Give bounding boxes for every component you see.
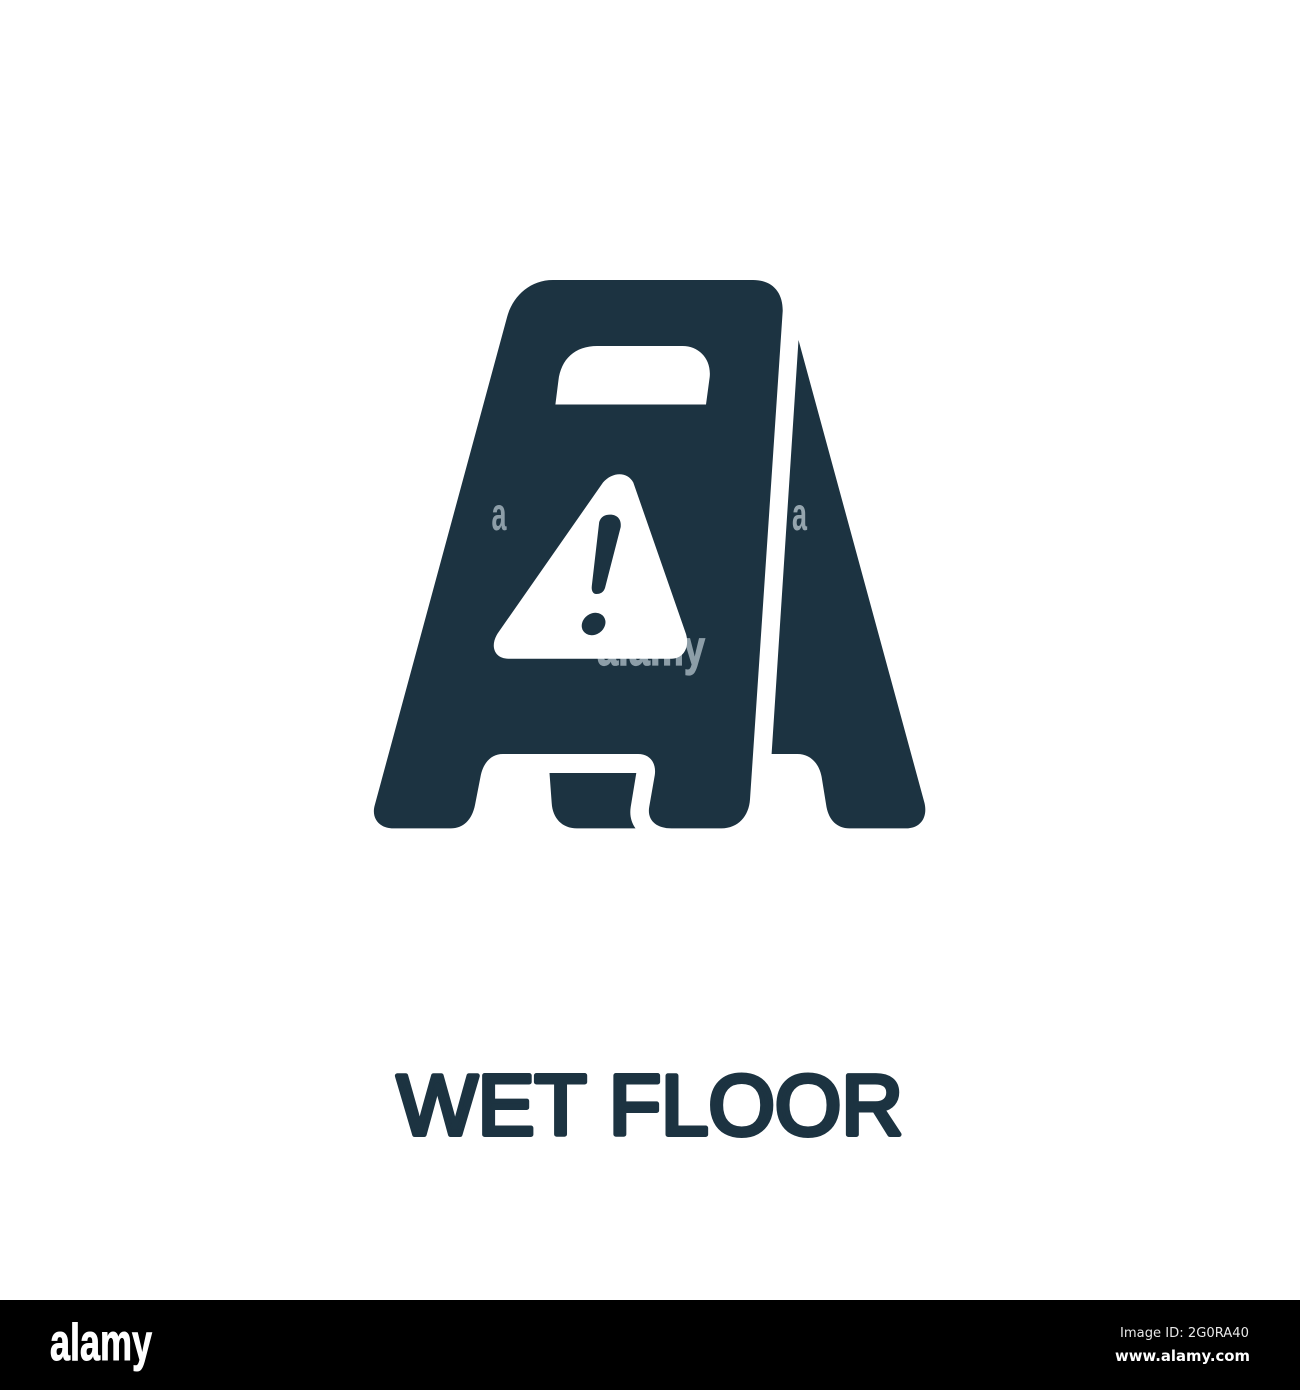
icon: wet floor sign [374, 280, 925, 828]
watermark letter right: a [792, 488, 807, 540]
sign front board [374, 280, 783, 828]
image id: Image ID: 2G0RA40 [1120, 1325, 1249, 1341]
watermark letter left: a [492, 488, 507, 540]
footer logo: alamy [50, 1314, 152, 1372]
footer bar [0, 1300, 1300, 1390]
watermark word: alamy [597, 622, 705, 676]
sign handle cut-out [555, 346, 710, 404]
title: wet floor: WET FLOOR [397, 1058, 903, 1154]
website: www.alamy.com [1115, 1347, 1250, 1365]
warning triangle [494, 474, 687, 659]
sign back leg [772, 340, 925, 828]
exclamation mark [577, 515, 621, 640]
sign inner rear leg [550, 773, 636, 828]
